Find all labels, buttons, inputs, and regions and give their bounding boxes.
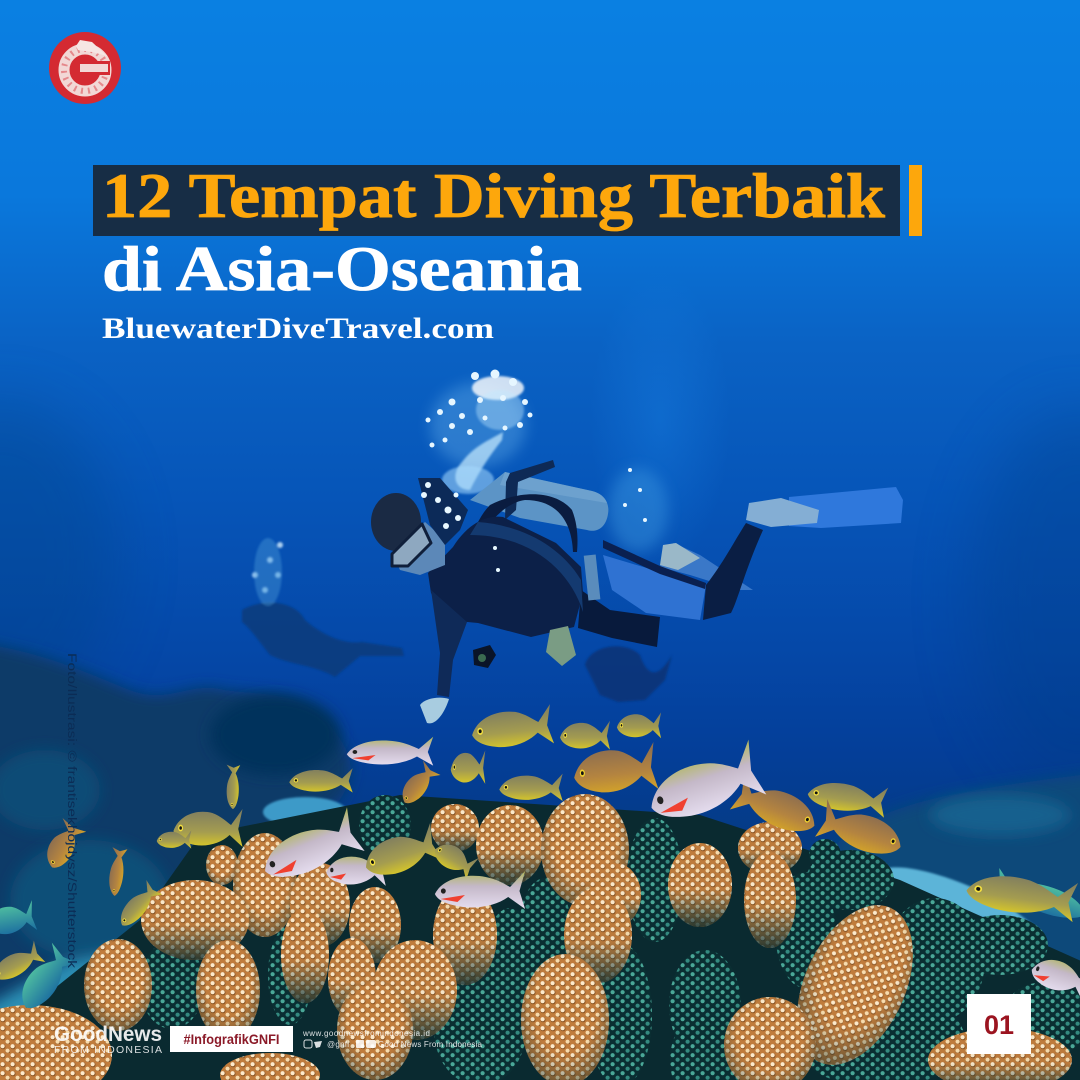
photo credit: Foto/Ilustrasi: © frantisekhojdysz/Shutterstock — [65, 653, 77, 968]
school of fish — [0, 704, 1080, 1016]
distant diver behind — [585, 646, 672, 702]
footer: brand logo — [54, 1023, 162, 1056]
coral: green back — [140, 795, 1080, 1080]
coral reef — [0, 794, 1080, 1080]
coral: orange fingers — [0, 794, 1072, 1080]
fin blade — [789, 487, 903, 528]
footer: brand logo: FROM INDONESIA — [54, 1044, 162, 1056]
mask — [392, 524, 431, 566]
title line 2: di Asia-Oseania — [102, 233, 582, 304]
gear detail — [584, 554, 600, 601]
title line 1: 12 Tempat Diving Terbaik — [102, 160, 885, 231]
footer: social links: @gnfi — [327, 1040, 349, 1049]
title accent bar — [909, 165, 922, 236]
hips — [578, 590, 660, 647]
head and hair — [371, 493, 421, 551]
footer: social links: Good News From Indonesia — [378, 1040, 483, 1049]
tank strap — [505, 460, 555, 520]
main diver — [371, 460, 903, 723]
blue thigh panel — [603, 555, 706, 620]
foot — [746, 498, 819, 527]
bubbles behind diver — [426, 370, 668, 552]
far foot — [660, 543, 700, 570]
title highlight bar — [93, 165, 900, 236]
footer: brand logo: GoodNews — [54, 1023, 162, 1046]
logo: GNFI badge — [49, 32, 121, 104]
footer: hashtag: #InfografikGNFI — [184, 1032, 280, 1047]
regulator hoses and bubbles on chest — [418, 478, 468, 545]
distant diver left — [242, 538, 404, 677]
footer: social links — [302, 1029, 483, 1049]
gauge — [473, 645, 496, 668]
air tank — [470, 472, 608, 531]
background reef — [0, 640, 1080, 1040]
page number — [967, 994, 1031, 1054]
title block — [93, 160, 922, 345]
arm — [431, 590, 467, 697]
hand — [420, 698, 449, 723]
footer: social links: www.goodnewsfromindonesia.id — [302, 1029, 430, 1038]
source line: BluewaterDiveTravel.com — [102, 312, 494, 345]
far fin — [660, 543, 753, 590]
torso — [428, 517, 583, 637]
other hand — [546, 626, 576, 666]
black leg — [703, 523, 763, 620]
page number: 01 — [984, 1010, 1014, 1040]
footer: hashtag — [170, 1026, 293, 1052]
